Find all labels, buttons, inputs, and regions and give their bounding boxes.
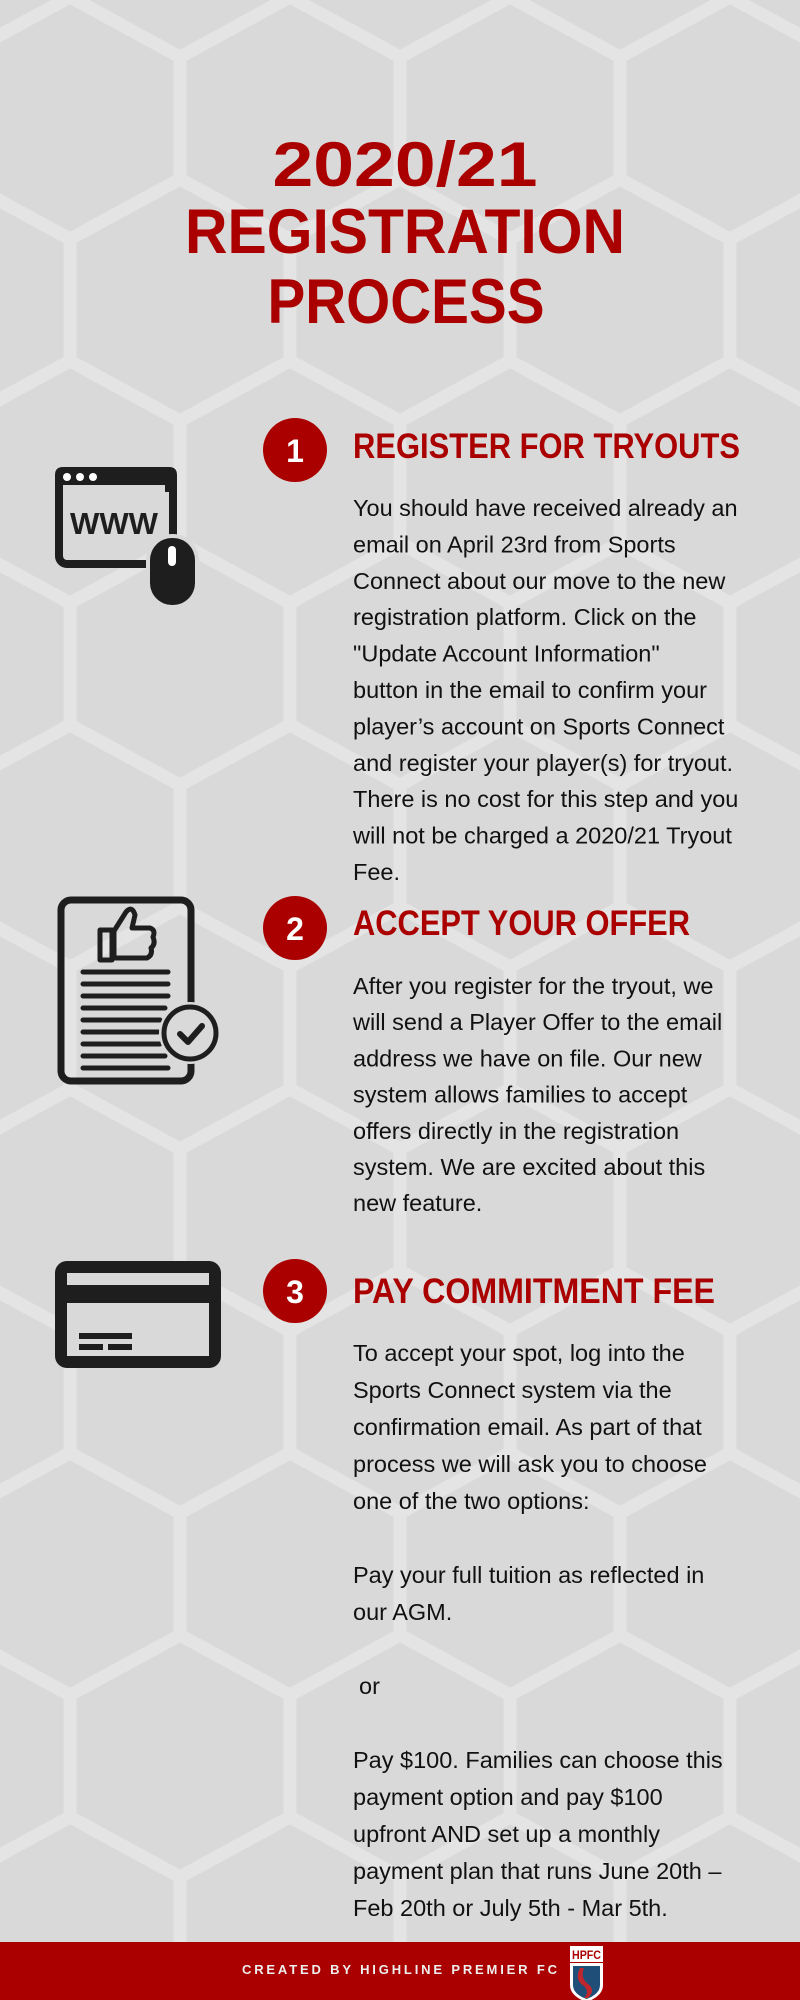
logo: HPFC	[572, 1948, 601, 1962]
step 2 text: will send a Player Offer to the email	[352, 1009, 722, 1035]
step 2 text	[352, 973, 722, 1216]
step 1 number	[263, 418, 327, 482]
step 3 text: our AGM.	[353, 1599, 452, 1625]
title: PROCESS	[268, 267, 544, 337]
footer	[0, 1942, 800, 2000]
step 1 text: Fee.	[353, 859, 400, 885]
step 1 text: Connect about our move to the new	[353, 568, 726, 594]
step 1 text: You should have received already an	[353, 495, 738, 521]
step 2 text: address we have on file. Our new	[353, 1045, 703, 1071]
step 1 text: button in the email to confirm your	[353, 677, 707, 703]
step 2 text: After you register for the tryout, we	[353, 973, 714, 999]
icon: browser with mouse	[55, 467, 199, 609]
icon: credit card	[55, 1261, 221, 1368]
step 1 text: "Update Account Information"	[353, 641, 660, 667]
step 3 text: payment plan that runs June 20th –	[353, 1858, 722, 1884]
step 1 text: player’s account on Sports Connect	[353, 713, 725, 739]
step 3 text: Sports Connect system via the	[353, 1377, 672, 1403]
step 1 number: 1	[286, 433, 304, 469]
step 2 heading: ACCEPT YOUR OFFER	[353, 904, 690, 943]
step 3 text: process we will ask you to choose	[353, 1451, 707, 1477]
logo	[570, 1946, 603, 2000]
step 3 text: confirmation email. As part of that	[353, 1414, 702, 1440]
footer: CREATED BY HIGHLINE PREMIER FC	[242, 1962, 558, 1977]
step 1 text: There is no cost for this step and you	[353, 786, 738, 812]
step 2 text: system. We are excited about this	[353, 1154, 705, 1180]
step 3 text: To accept your spot, log into the	[353, 1340, 685, 1366]
step 3 number: 3	[286, 1274, 304, 1310]
icon: document with thumbs up and check	[61, 900, 221, 1081]
step 3 text: Pay $100. Families can choose this	[353, 1747, 723, 1773]
step 1 text: registration platform. Click on the	[353, 604, 697, 630]
icon: browser with mouse: WWW	[70, 506, 159, 541]
title	[185, 130, 625, 337]
step 3 text: one of the two options:	[353, 1488, 589, 1514]
step 3 number	[263, 1259, 327, 1323]
step 3 text: or	[359, 1673, 380, 1699]
step 1 text	[352, 495, 738, 885]
step 2 number: 2	[286, 911, 304, 947]
step 3 text: Pay your full tuition as reflected in	[353, 1562, 704, 1588]
title: REGISTRATION	[185, 197, 625, 267]
step 1 text: email on April 23rd from Sports	[353, 531, 676, 557]
step 2 number	[263, 896, 327, 960]
step 3 text	[353, 1340, 723, 1921]
step 2 text: offers directly in the registration	[353, 1118, 679, 1144]
step 1 text: and register your player(s) for tryout.	[353, 750, 733, 776]
step 2 text: new feature.	[353, 1190, 482, 1216]
title: 2020/21	[272, 130, 538, 200]
step 1 text: will not be charged a 2020/21 Tryout	[352, 823, 732, 849]
step 3 heading: PAY COMMITMENT FEE	[353, 1272, 715, 1311]
step 2 text: system allows families to accept	[353, 1082, 688, 1108]
step 3 text: upfront AND set up a monthly	[353, 1821, 660, 1847]
step 3 text: Feb 20th or July 5th - Mar 5th.	[353, 1895, 668, 1921]
step 3 text: payment option and pay $100	[353, 1784, 663, 1810]
step 1 heading: REGISTER FOR TRYOUTS	[353, 427, 740, 466]
